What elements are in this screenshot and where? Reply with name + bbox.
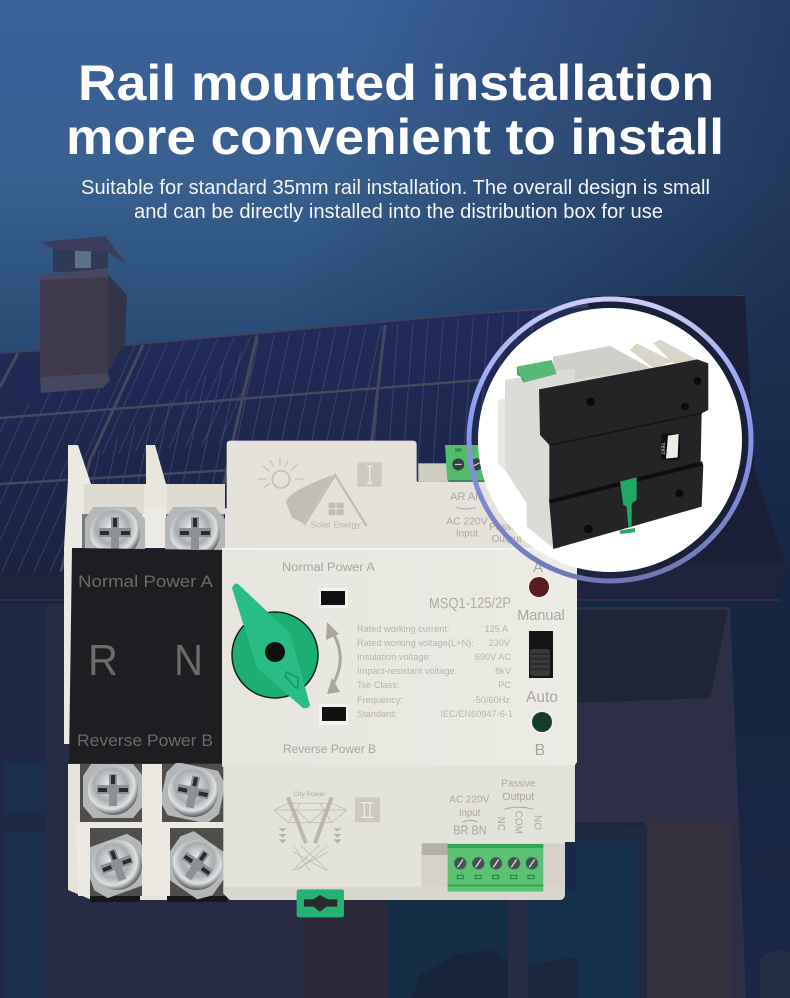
status controls: A, manual, auto, B: Manual [517, 608, 565, 624]
green terminal top [445, 445, 487, 481]
status controls: A, manual, auto, B: Auto [526, 689, 558, 706]
terminal labels: Passive [501, 779, 535, 790]
specification table: Rated working current: [357, 624, 449, 634]
input labels: Output [492, 534, 522, 545]
specification table: 125 A [484, 624, 509, 634]
subtitle text: Suitable for standard 35mm rail installation. The overall design is small [81, 177, 710, 199]
status controls: A, manual, auto, B: B [535, 742, 545, 759]
specification table [357, 624, 513, 719]
inset circle: back view of switch [469, 299, 751, 581]
terminal labels: Input [459, 808, 481, 819]
background: chimney [39, 236, 127, 393]
specification table: 690V AC [475, 652, 511, 662]
terminal labels: Output [502, 791, 534, 803]
specification table: Insulation voltage: [357, 652, 431, 662]
background: house roof with solar panels [0, 296, 790, 604]
lower section of body with city power logo [223, 765, 575, 900]
model number: MSQ1-125/2P [429, 595, 511, 612]
icon: phase II badge [355, 797, 380, 822]
terminal screws [80, 507, 236, 905]
specification table: 8kV [495, 666, 512, 676]
icon: sun [258, 457, 303, 488]
specification table: IEC/EN60947-6-1 [440, 709, 513, 719]
terminal labels: NO [532, 815, 543, 830]
subtitle text [81, 177, 710, 223]
subtitle text: and can be directly installed into the distribution box for use [134, 201, 663, 223]
icon: city power pylon: City Power [293, 791, 326, 798]
icon: city power pylon [274, 791, 347, 871]
specification table: 230V [489, 638, 511, 648]
test label [660, 433, 680, 460]
input labels: Passive [489, 522, 525, 533]
left white terminal housing [64, 445, 227, 902]
indicator slots [319, 588, 348, 725]
terminal labels: BR BN [453, 824, 487, 838]
back of device [498, 339, 708, 549]
terminal cover strips [76, 764, 226, 896]
input labels: AR AN [450, 491, 483, 503]
background: house walls and windows [0, 604, 790, 998]
terminal labels: NC [495, 817, 506, 831]
icon: house with solar roof [286, 475, 367, 529]
black cover panel: N [174, 636, 203, 685]
specification table: Standard: [357, 709, 397, 719]
black cover panel: Reverse Power B [77, 731, 213, 750]
status controls: A, manual, auto, B [517, 559, 565, 759]
status controls: A, manual, auto, B: A [533, 559, 543, 576]
rotation arrows [326, 622, 340, 694]
icon: phase I badge [357, 462, 382, 487]
rotary green knob [232, 584, 318, 708]
test label: TEST [660, 443, 665, 455]
product: front view of transfer switch [64, 441, 577, 917]
terminal labels: COM [513, 811, 524, 834]
title [66, 55, 724, 165]
main body panel: Reverse Power B [283, 744, 376, 756]
title: Rail mounted installation [78, 55, 714, 111]
specification table: Impact-resistant voltage: [357, 666, 457, 676]
main body panel [222, 549, 577, 766]
black cover panel: Normal Power A [78, 572, 214, 591]
specification table: Tse Class: [357, 680, 399, 690]
specification table: Frequency: [357, 695, 403, 705]
input labels: AC 220V [446, 516, 488, 527]
input labels [446, 491, 525, 545]
title: more convenient to install [66, 109, 724, 165]
green release clip [619, 477, 637, 534]
black cover panel [64, 548, 222, 763]
specification table: Rated working voltage(L+N): [357, 638, 474, 648]
main body panel: Normal Power A [282, 562, 375, 574]
top section of body with solar energy logo [225, 441, 573, 550]
terminal labels [449, 779, 543, 838]
green DIN rail clip [297, 889, 344, 917]
input labels: Input [456, 529, 478, 540]
circle ring [469, 299, 751, 581]
green terminal [517, 360, 557, 383]
icon: house with solar roof: Solar Energy [311, 520, 361, 529]
black rear panel [539, 359, 708, 549]
specification table: PC [498, 680, 511, 690]
specification table: -50/60Hz [473, 695, 510, 705]
terminal labels: AC 220V [449, 795, 490, 806]
black cover panel: R [88, 636, 118, 685]
green output terminal block [422, 843, 565, 892]
white circle background [478, 308, 742, 572]
